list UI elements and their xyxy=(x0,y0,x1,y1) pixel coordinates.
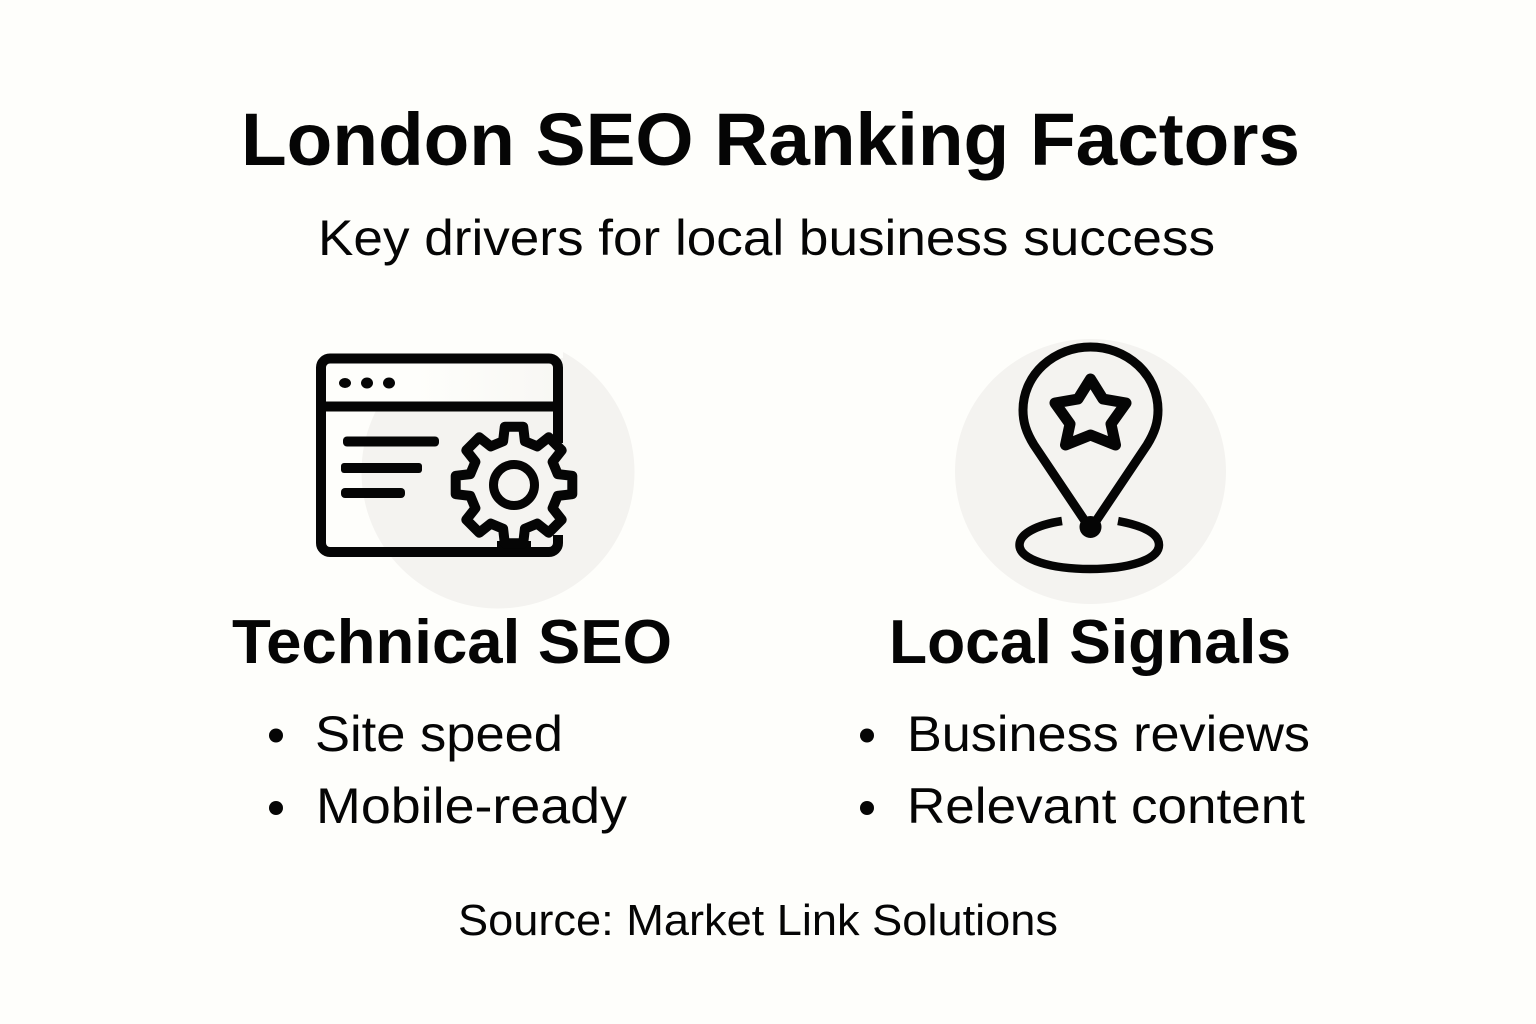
icon: browser window with gear xyxy=(321,325,634,608)
bullet list: local factors xyxy=(860,706,1310,834)
bullet: Site speed: Site speed xyxy=(315,706,563,762)
star xyxy=(1055,379,1126,445)
ground ellipse xyxy=(1020,521,1159,569)
backdrop mask above window xyxy=(350,325,563,358)
map pin tip xyxy=(1080,516,1102,538)
browser window frame xyxy=(321,358,558,552)
bullet: Business reviews: Business reviews xyxy=(907,706,1310,762)
gear xyxy=(456,427,572,543)
icon backdrop circle xyxy=(955,339,1226,604)
window header fill xyxy=(321,358,558,404)
icon backdrop circle xyxy=(362,336,634,608)
panel: local signals xyxy=(860,339,1310,834)
bullet list: technical factors xyxy=(269,706,627,834)
panel: technical SEO xyxy=(232,325,672,834)
bullet: Mobile-ready: Mobile-ready xyxy=(316,778,627,834)
heading: Local Signals: Local Signals xyxy=(889,608,1291,677)
gear bottom joint xyxy=(497,541,531,553)
source note: Source: Market Link Solutions xyxy=(458,896,1058,945)
icon: map pin with star xyxy=(955,339,1226,604)
heading: Technical SEO: Technical SEO xyxy=(232,608,672,677)
window text lines xyxy=(341,436,439,498)
right border gap behind gear xyxy=(552,443,564,535)
browser window dots xyxy=(339,378,395,388)
map pin outline xyxy=(1023,347,1158,521)
bullet: Relevant content: Relevant content xyxy=(907,778,1305,834)
title: London SEO Ranking Factors xyxy=(241,98,1300,181)
subtitle: Key drivers for local business success xyxy=(318,210,1215,266)
